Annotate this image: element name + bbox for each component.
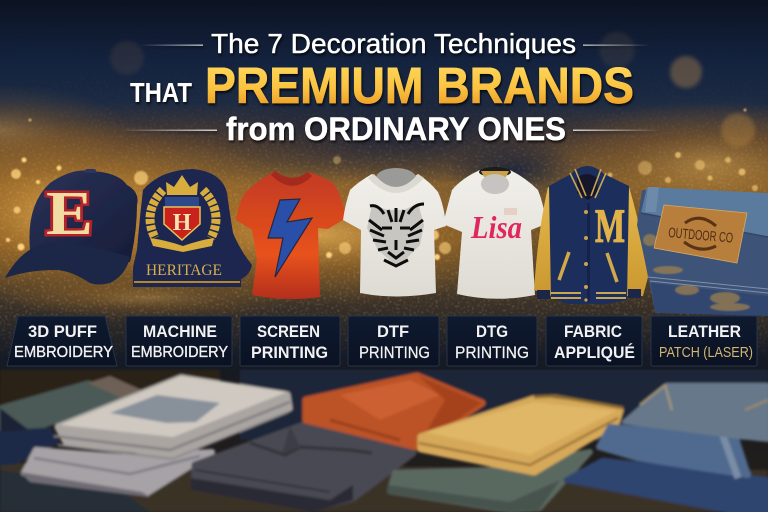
product: embroidered heritage beanie	[133, 169, 252, 287]
product: DTG Lisa tee	[443, 167, 546, 299]
product: jeans with leather patch	[637, 187, 768, 316]
tiger face print	[367, 203, 424, 267]
label: fabric applique: FABRIC	[564, 322, 622, 341]
charcoal shirts	[191, 425, 413, 512]
technique labels row	[7, 316, 757, 366]
folded clothes row	[0, 370, 768, 512]
product: screen printed red tee	[236, 171, 346, 299]
product: 3D puff embroidered cap	[5, 169, 138, 284]
label: DTG printing: PRINTING	[455, 343, 529, 362]
label: 3D puff embroidery: 3D PUFF	[28, 322, 97, 341]
lightning bolt	[268, 199, 312, 277]
label: screen printing	[240, 316, 340, 366]
title block	[120, 28, 660, 147]
letter M patch: M	[595, 200, 625, 253]
leather patch with outdoor co: OUTDOOR CO	[668, 224, 734, 246]
label: fabric applique: APPLIQUÉ	[554, 343, 635, 362]
label: leather patch laser: PATCH (LASER)	[659, 344, 753, 361]
laurel crest: H	[173, 210, 192, 236]
label: fabric applique	[546, 316, 642, 366]
label: machine embroidery: MACHINE	[143, 322, 217, 341]
folded denim stack	[566, 385, 768, 512]
label: DTF printing	[348, 316, 439, 366]
label: 3D puff embroidery: EMBROIDERY	[14, 344, 113, 361]
label: machine embroidery	[126, 316, 232, 366]
heritage lettering: HERITAGE	[146, 262, 222, 279]
sage folded tee	[387, 452, 590, 512]
cap letter E: E	[46, 180, 93, 248]
Lisa script print: Lisa	[470, 209, 522, 245]
label: DTG printing	[447, 316, 537, 366]
white folded tees	[20, 376, 290, 497]
yellow folded tee	[419, 396, 623, 472]
label: leather patch laser	[651, 316, 757, 366]
label: machine embroidery: EMBROIDERY	[131, 344, 228, 361]
table surface	[0, 463, 768, 512]
label: screen printing: PRINTING	[251, 343, 328, 362]
far-left stack	[0, 376, 146, 463]
product: fabric applique varsity jacket	[534, 166, 648, 304]
label: leather patch laser: LEATHER	[668, 322, 741, 341]
title line 2: that premium brands: PREMIUM BRANDS	[205, 57, 634, 114]
label: DTF printing: DTF	[377, 322, 409, 341]
product: DTF tiger tee	[343, 168, 446, 296]
jacket pockets and cuffs	[537, 252, 641, 299]
label: DTG printing: DTG	[476, 322, 508, 341]
label: DTF printing: PRINTING	[359, 343, 430, 362]
title line 1 with rules: The 7 Decoration Techniques	[211, 28, 576, 59]
back cloth	[240, 370, 768, 440]
title line 2: that premium brands: THAT	[130, 77, 192, 108]
label: 3D puff embroidery	[7, 316, 117, 366]
label: screen printing: SCREEN	[257, 322, 320, 341]
title line 3 with rules: from ORDINARY ONES	[226, 111, 566, 147]
orange tee	[306, 375, 482, 447]
